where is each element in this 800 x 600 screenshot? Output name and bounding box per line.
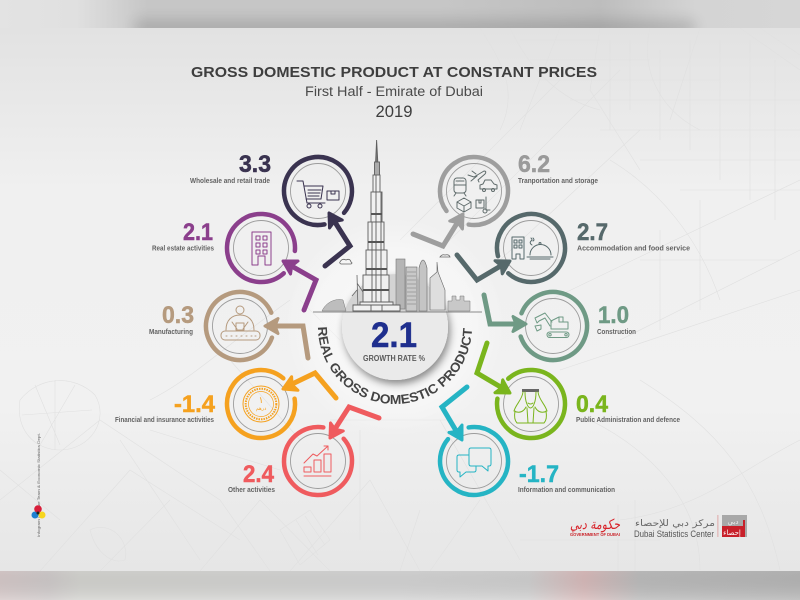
icon: dirham coin <box>243 386 279 422</box>
value: -1.4 <box>174 391 216 418</box>
top blurred band <box>76 0 800 28</box>
skyline <box>313 255 482 312</box>
arrow <box>324 407 379 442</box>
label: Construction <box>597 329 636 336</box>
value: 3.3 <box>239 151 271 178</box>
ring <box>427 144 521 238</box>
value: 0.4 <box>576 391 609 418</box>
main title: GROSS DOMESTIC PRODUCT AT CONSTANT PRICES <box>191 64 597 81</box>
ring <box>222 365 300 443</box>
icon: Burj Khalifa <box>353 140 400 311</box>
arrow <box>279 255 316 310</box>
bottom blurred band <box>0 571 800 600</box>
centre circle with skyline <box>313 140 482 404</box>
icon: emirati man <box>514 389 547 423</box>
year: 2019 <box>376 103 412 121</box>
arrow <box>484 295 526 332</box>
value: 0.3 <box>162 302 194 329</box>
ring <box>213 200 309 296</box>
label: Manufacturing <box>149 329 193 336</box>
ring <box>483 356 579 452</box>
panel: construction <box>484 282 636 370</box>
growth disc <box>342 274 448 380</box>
panel: information and communication <box>435 387 615 500</box>
icon: shopping cart <box>297 181 339 208</box>
value: -1.7 <box>519 461 559 488</box>
label: Tranportation and storage <box>518 178 598 185</box>
label: Wholesale and retail trade <box>190 178 270 185</box>
icon: dirham coin: ١ <box>259 396 263 406</box>
value: 6.2 <box>518 151 550 178</box>
credit: vertical infographic note: Infogram Creative Team & Economic Statistics Dept. <box>37 433 41 537</box>
panel: other activities <box>228 407 379 509</box>
panel: wholesale and retail trade <box>190 151 358 266</box>
value: 2.7 <box>577 219 608 246</box>
panel: transportation and storage <box>413 144 598 246</box>
icon: dirham coin: درهم <box>256 406 266 412</box>
logo: Dubai Statistics Center: مركز دبي للإحصاء <box>635 519 715 529</box>
arrow <box>323 209 350 266</box>
icon: speech bubbles <box>457 448 491 477</box>
panel: financial and insurance activities <box>115 365 336 443</box>
label: Accommodation and food service <box>577 246 690 252</box>
ring <box>278 151 358 231</box>
soft halo behind centre <box>285 217 505 437</box>
panel: public administration and defence <box>477 343 680 452</box>
arrow <box>457 254 514 280</box>
logo: Government of Dubai: حكومة دبي <box>570 517 620 533</box>
subtitle: First Half - Emirate of Dubai <box>305 84 483 99</box>
label: Information and communication <box>518 487 615 494</box>
arrow <box>265 318 308 358</box>
label: Public Administration and defence <box>576 417 680 424</box>
arrow <box>442 387 468 444</box>
icon: building <box>252 232 271 265</box>
credit: vertical infographic note <box>32 433 46 537</box>
logo: Dubai Statistics Center: دبي <box>728 518 738 526</box>
logo: Dubai Statistics Center: إحصاء <box>723 529 741 537</box>
logo: Dubai Statistics Center: Dubai Statistics Center <box>634 529 714 540</box>
logo: Government of Dubai: GOVERNMENT OF DUBAI <box>570 532 620 537</box>
title block <box>191 64 597 121</box>
curved label: REAL GROSS DOMESTIC PRODUCT <box>318 327 472 404</box>
value: 2.1 <box>183 219 213 246</box>
growth value: 2.1 <box>371 316 417 355</box>
panel: manufacturing <box>149 282 308 370</box>
arrow <box>280 373 336 398</box>
label: Financial and insurance activities <box>115 417 214 424</box>
icon: transport modes <box>454 171 497 213</box>
logo: Dubai Statistics Center <box>634 515 747 540</box>
arrow <box>413 210 469 246</box>
icon: excavator <box>535 313 569 338</box>
label: Other activities <box>228 487 275 494</box>
ring <box>490 207 572 289</box>
arrow <box>477 343 514 399</box>
ring <box>509 282 597 370</box>
logo: Government of Dubai <box>570 517 620 537</box>
ring <box>196 282 284 370</box>
label: Real estate activities <box>152 246 214 252</box>
icon: hotel and cloche <box>512 237 553 259</box>
icon: worker at conveyor <box>221 306 260 340</box>
icon: rising chart <box>304 446 331 476</box>
panel: accommodation and food service <box>457 207 690 289</box>
value: 2.4 <box>243 461 275 488</box>
ring <box>270 413 366 509</box>
value: 1.0 <box>598 302 629 329</box>
ring <box>435 422 513 500</box>
panel: real estate activities <box>152 200 316 310</box>
growth label: GROWTH RATE % <box>363 354 425 363</box>
